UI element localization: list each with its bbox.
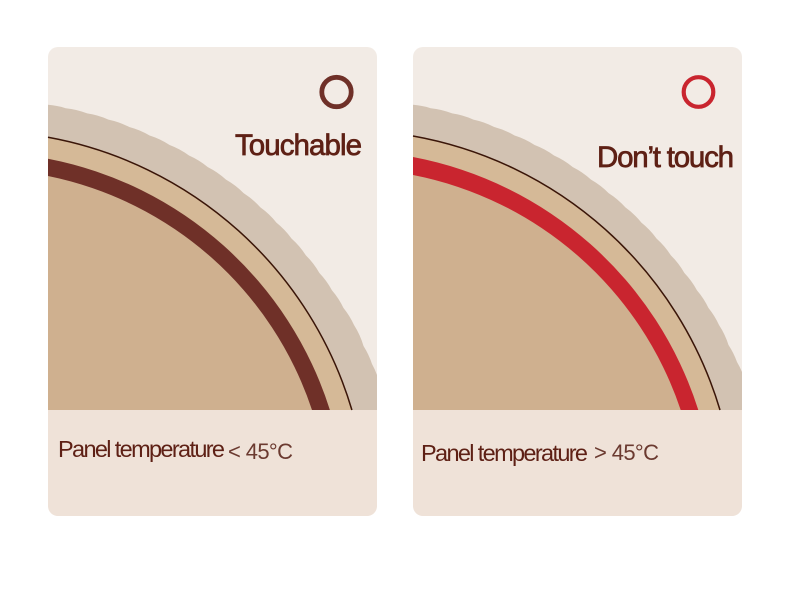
panel: do not touch <box>413 47 742 516</box>
panel background: top <box>413 47 742 411</box>
caption label: Panel temperature <box>421 440 588 466</box>
panel background: bottom strip <box>48 410 377 516</box>
panel background: top <box>48 47 377 411</box>
temperature band: red <box>413 157 698 410</box>
panel background: bottom strip <box>413 410 742 516</box>
temperature band: dark brown <box>48 159 330 410</box>
caption: panel temperature below 45 <box>58 436 293 464</box>
inner body <box>48 176 312 410</box>
glass surface layer <box>48 137 352 410</box>
glass surface layer <box>413 136 720 410</box>
cross-section diagram: hot panel <box>413 105 742 410</box>
dark edge line <box>48 137 352 410</box>
outer wavy layer <box>413 105 742 410</box>
dark edge line <box>413 136 720 410</box>
panel: touchable <box>48 47 377 516</box>
status ring: red <box>684 77 713 107</box>
caption label: Panel temperature <box>58 436 225 462</box>
caption: panel temperature above 45 <box>421 440 659 466</box>
outer wavy layer <box>48 105 377 410</box>
status ring: brown <box>322 77 351 107</box>
cross-section diagram: cool panel <box>48 105 377 410</box>
heading: Don't touch: Don’t touch <box>597 141 734 174</box>
heading: Touchable: Touchable <box>235 129 362 162</box>
caption value: < 45°C <box>228 439 293 464</box>
inner body <box>413 175 681 410</box>
caption value: > 45°C <box>594 440 659 465</box>
